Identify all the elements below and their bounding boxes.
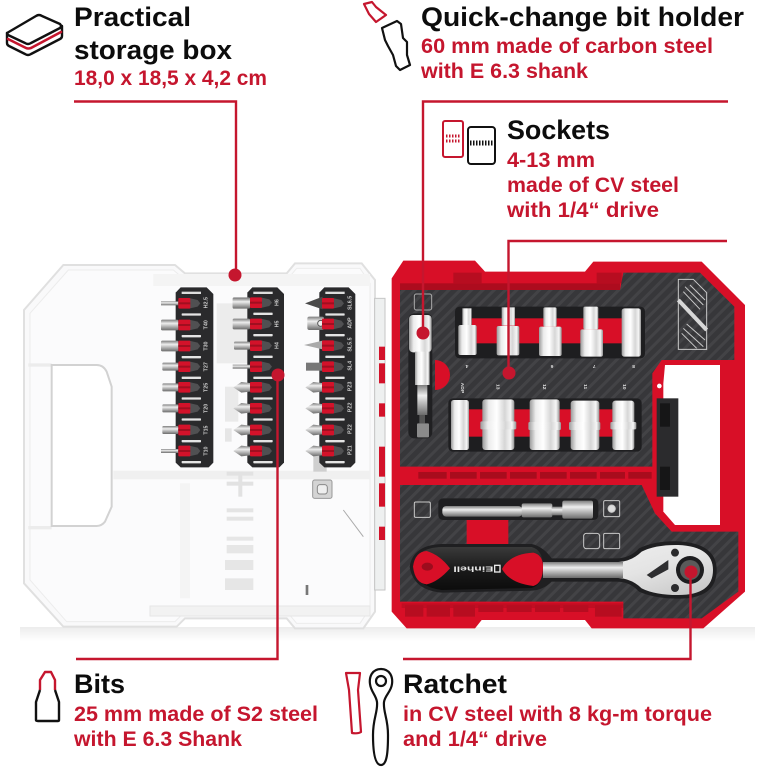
bit strip 3: slotted and pozidriv bits: PZ2 [347, 403, 353, 412]
heading: quick-change bit holder: with E 6.3 shank [420, 60, 588, 83]
bit strip 1: hex and torx bits: T25 [203, 383, 209, 392]
bit strip 1: hex and torx bits: T15 [203, 425, 209, 435]
bit strip 1: hex and torx bits: T10 [203, 446, 209, 456]
bit strip 3: slotted and pozidriv bits: ADP [347, 317, 353, 329]
bit holder [408, 294, 450, 438]
case structural bands [400, 273, 652, 617]
logo plate [678, 279, 707, 349]
bit strip 1: hex and torx bits: T40 [203, 320, 209, 329]
lower carbon foam tray [400, 485, 738, 618]
leader line: bits [76, 368, 284, 659]
heading: ratchet: and 1/4“ drive [403, 728, 547, 751]
upper carbon foam tray [400, 273, 734, 467]
socket size labels: 8 [632, 363, 635, 369]
leader line: sockets [502, 241, 727, 380]
lid body [24, 263, 375, 628]
lid handle opening [52, 365, 112, 526]
ratchet: Einhell [453, 565, 493, 574]
socket size labels: 7 [593, 363, 596, 369]
bit strip 1: hex and torx bits: T27 [203, 362, 209, 371]
socket size labels: 4 [465, 363, 468, 369]
bit strip 1: hex and torx bits: T30 [203, 341, 209, 351]
heading: ratchet [403, 669, 712, 751]
socket size labels: 6 [550, 363, 553, 369]
ratchet [410, 541, 717, 599]
bit strip 1: hex and torx bits [161, 287, 213, 467]
panel: red case with tools [392, 261, 745, 628]
heading: ratchet: Ratchet [403, 669, 507, 699]
extension bar [438, 498, 598, 548]
bit strip 3: slotted and pozidriv bits: SL5.5 [347, 337, 353, 352]
bit strip 2: hex and phillips bits: H6 [275, 299, 281, 306]
icon: sockets [443, 121, 495, 164]
heading: sockets: with 1/4“ drive [506, 199, 659, 222]
socket wells with red floor [448, 307, 645, 452]
icon: bit holder [364, 2, 410, 70]
socket size labels [459, 363, 635, 394]
bit strip 1: hex and torx bits: T20 [203, 404, 209, 413]
heading: bits: 25 mm made of S2 steel [74, 703, 318, 726]
bit strip 2: hex and phillips bits: H5 [275, 320, 281, 327]
heading: quick-change bit holder [420, 2, 745, 83]
lower socket row [451, 399, 636, 450]
icon: ratchet [346, 669, 392, 765]
heading: quick-change bit holder: Quick-change bit holder [421, 2, 745, 32]
bit strip 3: slotted and pozidriv bits: SL6.5 [347, 296, 353, 310]
icon: storage box [7, 15, 62, 55]
bit strip 3: slotted and pozidriv bits: PZ1 [347, 445, 353, 455]
socket size labels: 13 [494, 384, 500, 390]
icon: bit [36, 672, 59, 721]
leader line: bit holder [416, 102, 728, 340]
heading: sockets: Sockets [507, 115, 610, 145]
heading: practical storage box: Practical [74, 2, 191, 32]
socket size labels: 10 [621, 384, 627, 390]
heading: ratchet: in CV steel with 8 kg-m torque [403, 703, 712, 726]
case handle opening [663, 365, 720, 525]
bit strip 3: slotted and pozidriv bits: PZ2 [347, 424, 353, 434]
red case body [392, 261, 745, 628]
bit strip 3: slotted and pozidriv bits [304, 287, 355, 467]
bit strip 1: hex and torx bits: H2.5 [203, 297, 209, 308]
bit strip 2: hex and phillips bits [233, 287, 284, 467]
bit strip 3: slotted and pozidriv bits: SL4 [347, 361, 353, 371]
heading: practical storage box [74, 2, 267, 90]
upper socket row [458, 307, 641, 357]
leader line: storage box [74, 102, 242, 282]
heading: bits: with E 6.3 Shank [73, 728, 242, 751]
socket size labels: ADP [459, 383, 465, 394]
socket size labels: 11 [582, 384, 588, 389]
hinge strip [375, 298, 385, 590]
heading: practical storage box: storage box [74, 35, 232, 65]
heading: quick-change bit holder: 60 mm made of carbon steel [421, 35, 713, 58]
leader line: ratchet [403, 566, 698, 659]
bit strip 3: slotted and pozidriv bits: PZ3 [347, 382, 353, 391]
heading: sockets: made of CV steel [507, 174, 679, 197]
socket size labels: 12 [541, 384, 547, 390]
panel: transparent lid with bits [24, 263, 385, 628]
heading: sockets: 4-13 mm [507, 149, 595, 172]
heading: sockets [506, 115, 679, 222]
heading: bits [73, 669, 318, 751]
heading: bits: Bits [74, 669, 125, 699]
background shadow under the boxes [20, 627, 755, 641]
latch on handle opening [657, 384, 678, 497]
bit strip 2: hex and phillips bits: H4 [275, 342, 281, 349]
heading: practical storage box: 18,0 x 18,5 x 4,2 cm [74, 67, 267, 90]
foam markers [414, 501, 620, 549]
